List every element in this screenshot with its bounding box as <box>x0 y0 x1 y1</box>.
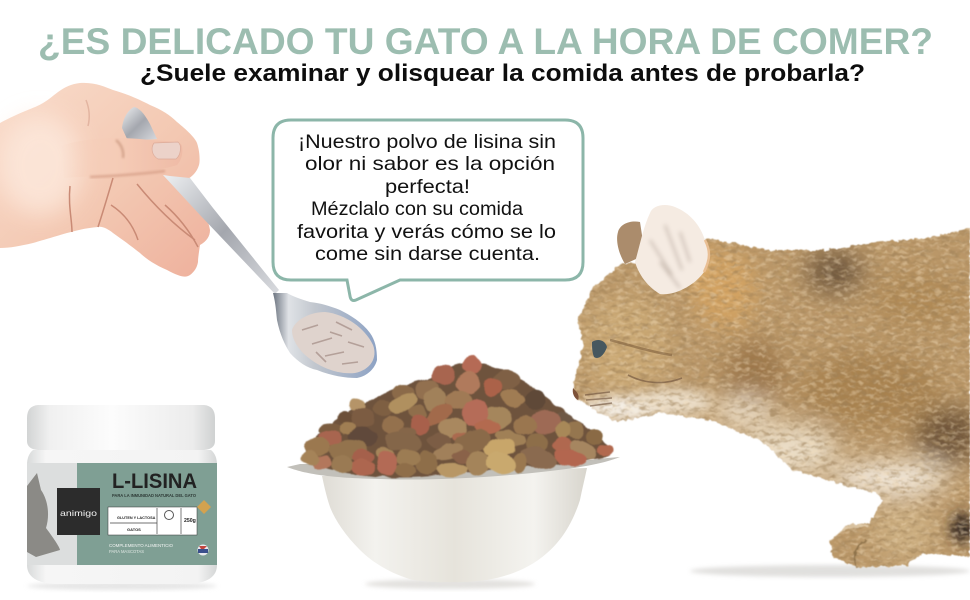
bubble outline <box>273 120 583 300</box>
jar label <box>27 463 217 565</box>
bubble text <box>297 131 556 265</box>
pile base <box>302 363 610 478</box>
product tagline: PARA LA INMUNIDAD NATURAL DEL GATO <box>112 493 197 498</box>
bowl body <box>322 468 587 582</box>
bubble text: ¡Nuestro polvo de lisina sin <box>298 131 556 153</box>
palm highlight <box>0 115 82 215</box>
info box <box>108 507 197 535</box>
fur colour patches <box>580 250 970 560</box>
nose and whisker marks <box>573 388 579 400</box>
ear shading <box>704 240 709 272</box>
info box: GATOS <box>127 527 141 532</box>
bowl shadow <box>365 579 535 589</box>
near ear <box>635 205 709 294</box>
finger creases <box>69 100 198 247</box>
thumb <box>60 138 182 178</box>
food bowl <box>287 356 620 589</box>
brand name: animigo <box>60 508 97 518</box>
bubble text: olor ni sabor es la opción <box>305 153 555 175</box>
shadow under thumb <box>90 171 165 177</box>
cat body <box>572 227 970 568</box>
thumbnail <box>152 142 180 159</box>
jar lid <box>27 405 215 450</box>
bowl rim <box>287 457 620 480</box>
powder in spoon <box>292 312 374 373</box>
spoon handle <box>163 175 279 294</box>
brand box <box>57 488 100 535</box>
hand holding spoon <box>0 83 377 378</box>
bubble text: perfecta! <box>385 176 470 198</box>
subtitle: ¿Suele examinar y olisquear la comida antes de probarla? <box>140 60 865 87</box>
far ear <box>617 221 645 264</box>
brow stripe <box>610 340 672 355</box>
label cat photo <box>27 473 60 557</box>
supplement text: COMPLEMENTO ALIMENTICIO <box>109 543 173 548</box>
front paw toes <box>855 540 866 568</box>
info box: GLUTEN Y LACTOSA <box>117 516 156 520</box>
cat shadow <box>690 565 970 577</box>
fur texture dark <box>576 230 970 566</box>
bubble text: come sin darse cuenta. <box>315 243 540 265</box>
product jar <box>27 405 217 590</box>
flag emblem <box>198 544 208 556</box>
spoon bowl <box>273 293 377 378</box>
spoon head <box>122 107 157 141</box>
fur texture light <box>573 228 970 568</box>
bubble text: Mézclalo con su comida <box>311 198 523 220</box>
jar shadow <box>27 582 217 590</box>
knuckle wrinkle <box>116 140 123 158</box>
product name: L-LISINA <box>112 470 197 493</box>
jar label: PARA MASCOTAS <box>109 549 144 554</box>
info box: 250g <box>184 518 196 524</box>
hand palm and fingers <box>0 83 210 277</box>
speech bubble <box>273 120 583 300</box>
eye <box>592 340 607 358</box>
bubble text: favorita y verás cómo se lo <box>297 221 556 243</box>
title: ¿ES DELICADO TU GATO A LA HORA DE COMER? <box>38 21 933 62</box>
badge <box>197 500 211 514</box>
kibble pile <box>301 356 613 478</box>
kibbles <box>301 356 613 477</box>
cat <box>560 195 970 580</box>
powder streaks <box>302 322 364 364</box>
jar body <box>27 450 217 584</box>
